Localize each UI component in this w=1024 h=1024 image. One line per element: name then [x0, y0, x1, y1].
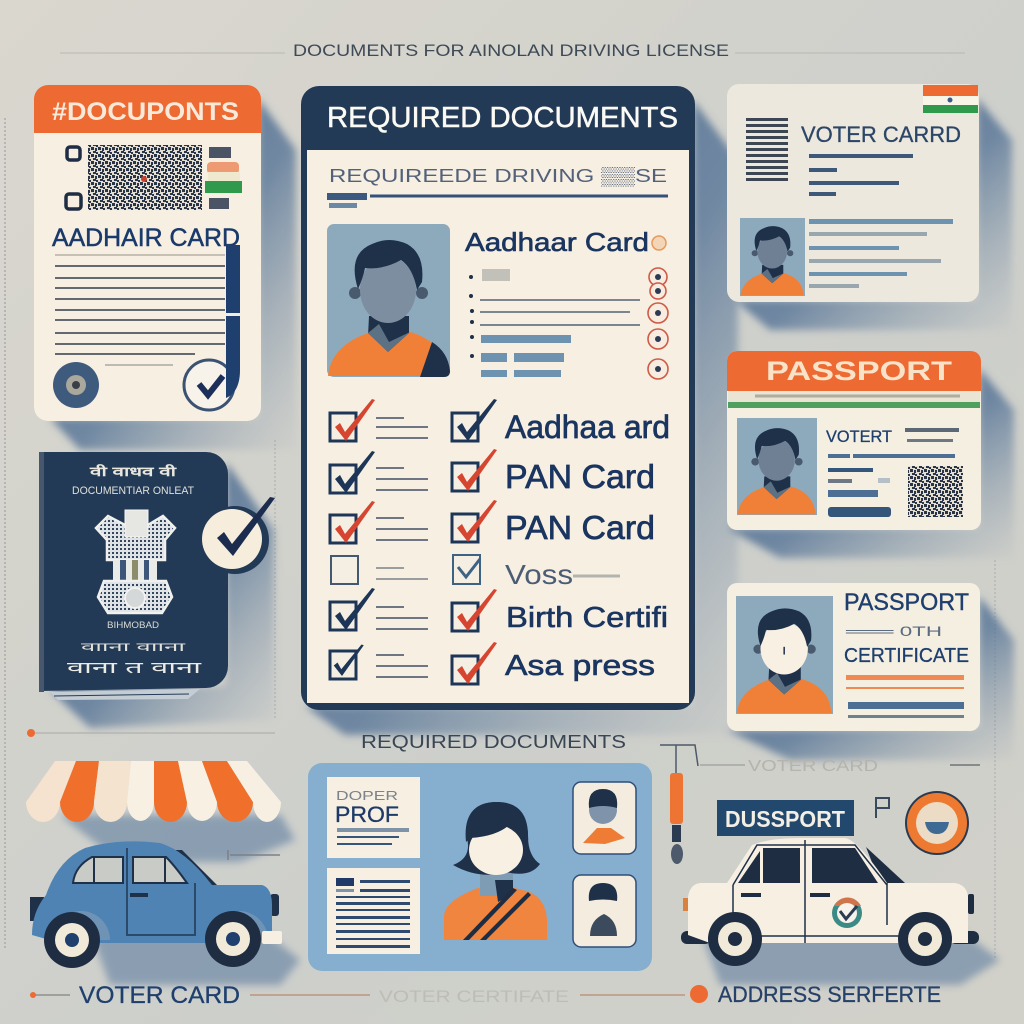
QR code [908, 466, 963, 517]
icon: blue car [30, 841, 300, 985]
subheading: REQUIREEDE DRIVING ▒▒SE [329, 166, 667, 187]
panel: Aadhaar documents card: AADHAIR CARD [52, 224, 240, 252]
panel: passport cover: BIHMOBAD [107, 620, 160, 630]
checklist: right column: PAN Card [505, 458, 655, 495]
panel: birth certificate card: PASSPORT [844, 589, 969, 616]
panel: voter card: VOTER CARRD [801, 122, 961, 147]
portrait [740, 218, 805, 296]
document lines [55, 255, 225, 365]
proof card [327, 777, 420, 858]
card heading: #DOCUPONTS [52, 98, 239, 126]
national emblem [96, 510, 175, 613]
passport label [717, 800, 854, 836]
check badge [201, 497, 275, 574]
barcode [746, 118, 788, 181]
panel: passport card [727, 351, 1014, 558]
icon: flag [876, 798, 889, 818]
portrait [736, 596, 833, 714]
right pins [648, 268, 668, 379]
icon: orange badge [905, 791, 969, 855]
footer: address certificate: ADDRESS SERFERTE [718, 982, 941, 1007]
portrait [737, 418, 817, 515]
title: DOCUMENTS FOR AINOLAN DRIVING LICENSE [293, 41, 729, 60]
panel: voter card [727, 84, 1012, 330]
icon: shop awning [26, 761, 295, 862]
checklist: right column: Asa press [505, 650, 655, 682]
panel: Aadhaar documents card [34, 85, 296, 450]
panel: passport card: VOTERT [826, 427, 892, 446]
heading: PASSPORT [766, 356, 953, 386]
woman portrait [444, 802, 547, 940]
panel: proof of identity [308, 763, 652, 971]
portrait [327, 224, 450, 377]
small portrait 2 [573, 875, 636, 947]
info lines [809, 154, 953, 288]
card name: Aadhaar Card [465, 227, 649, 257]
footer: voter card [30, 982, 370, 1009]
verified badge [832, 898, 862, 928]
flag [923, 85, 978, 113]
panel: birth certificate card [727, 583, 1014, 760]
passport top text: वी वाधव वी [88, 464, 177, 479]
footer: address certificate [580, 982, 941, 1007]
proof card: DOPER [336, 788, 398, 803]
checklist: right column: Aadhaa ard [505, 409, 670, 445]
QR code [88, 145, 202, 210]
checklist: right column [452, 399, 670, 684]
panel: birth certificate card: CERTIFICATE [844, 645, 969, 667]
footer: voter certificate: VOTER CERTIFATE [379, 987, 569, 1006]
flag badge [205, 162, 242, 193]
panel heading: REQUIRED DOCUMENTS [327, 102, 678, 134]
panel: required documents checklist [301, 86, 738, 735]
faded label: VOTER CARD [748, 758, 878, 775]
icon: white car [681, 838, 1000, 985]
check badge [184, 360, 234, 410]
panel: passport cover: वााना वााना [81, 640, 187, 654]
pen [226, 245, 240, 398]
flag stripes [728, 391, 980, 402]
section label: REQUIRED DOCUMENTS [361, 732, 626, 752]
checklist: right column: Voss [505, 559, 573, 590]
panel: birth certificate card: ═══ 0TH [844, 623, 942, 639]
panel: passport cover [39, 452, 275, 728]
detail lines [469, 269, 640, 377]
section label [27, 729, 626, 752]
text document [327, 868, 420, 954]
small portrait 1 [573, 782, 636, 854]
checklist: right column: Birth Certifi [506, 602, 668, 634]
footer: voter card: VOTER CARD [79, 982, 240, 1009]
checklist: left column [330, 399, 428, 679]
checklist: right column: PAN Card [505, 509, 655, 546]
panel: passport cover: वाना त वाना [67, 660, 203, 677]
seal icon [53, 362, 99, 408]
info lines [828, 428, 959, 517]
passport label: DUSSPORT [725, 806, 845, 832]
icon: pen marker [660, 745, 698, 864]
panel: passport cover: DOCUMENTIAR ONLEAT [72, 485, 194, 497]
proof card: PROF [335, 802, 399, 827]
